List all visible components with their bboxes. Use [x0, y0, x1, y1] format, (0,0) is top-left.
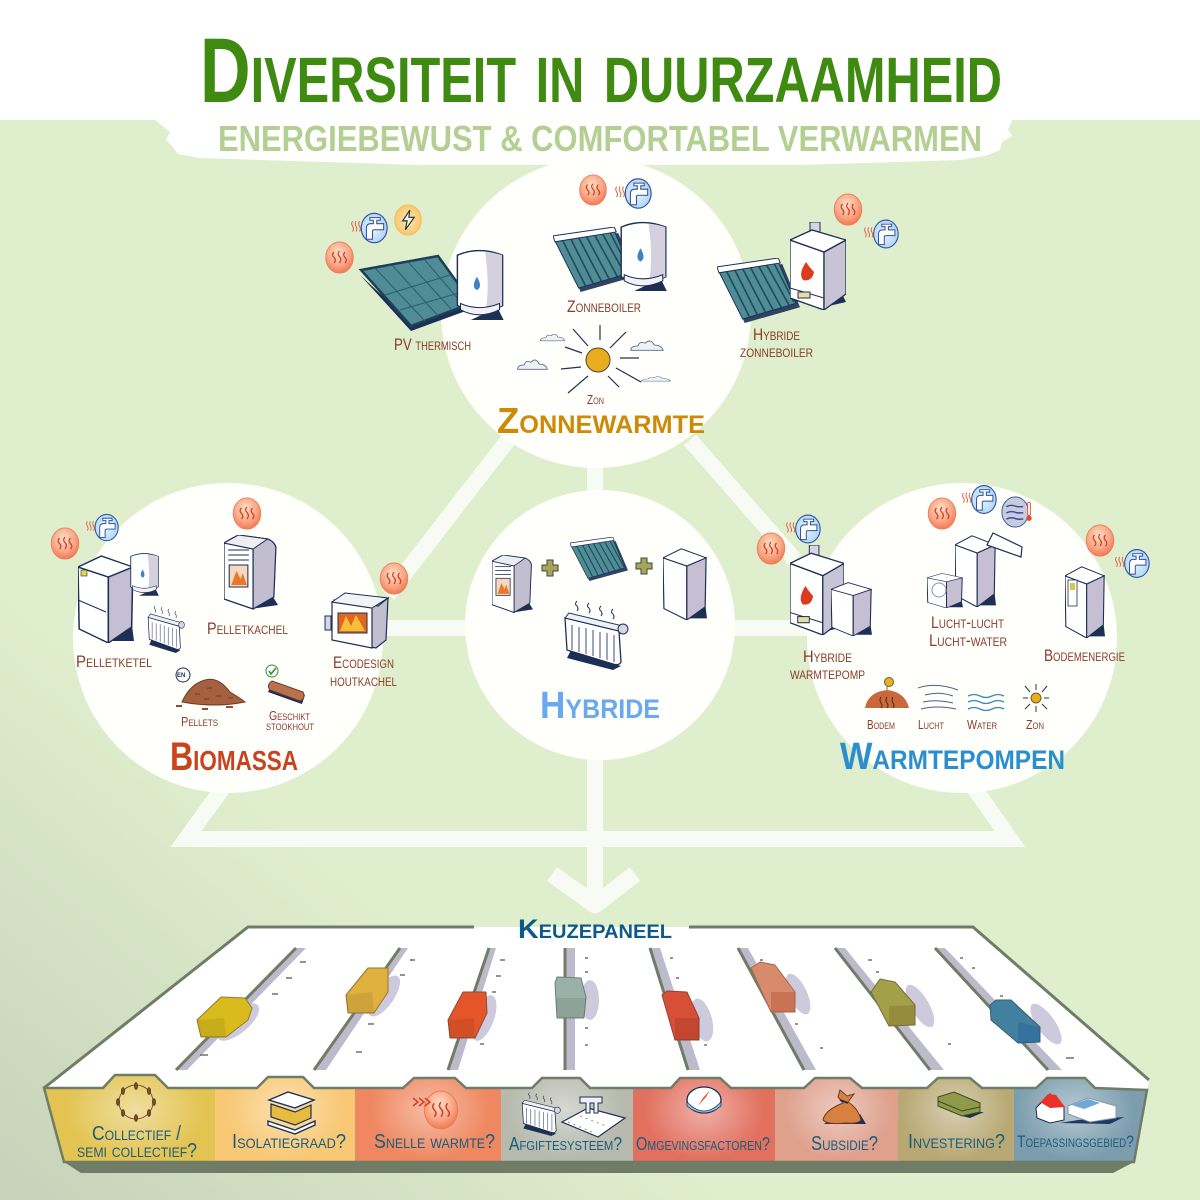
slider tracks — [176, 948, 1062, 1070]
arrow to keuzepaneel — [552, 874, 635, 905]
bubbles — [834, 194, 898, 248]
icon: snelle warmte — [413, 1091, 458, 1129]
icon: subsidie geldzak — [823, 1090, 866, 1124]
label: Zonneboiler — [567, 297, 641, 316]
icon: investering biljetten — [938, 1092, 984, 1118]
icon: hybride warmtepomp — [790, 545, 872, 636]
connection lines between circles — [186, 440, 1010, 900]
label: semi collectief? — [77, 1140, 197, 1162]
bubble — [233, 498, 261, 529]
icon: zon met wolken — [518, 325, 670, 393]
bubbles bodemenergie — [1086, 525, 1149, 577]
icon: bodemwarmtepomp — [1065, 567, 1105, 638]
heading: Hybride — [540, 685, 660, 727]
icon: toepassingsgebied huis — [1033, 1094, 1124, 1124]
label: Hybride — [753, 325, 800, 344]
icon: pelletkachel — [224, 535, 278, 609]
icon: afgiftesysteem — [522, 1093, 625, 1137]
label: Snelle warmte? — [374, 1131, 495, 1153]
panel top face — [44, 927, 1149, 1095]
label: Lucht-water — [929, 631, 1007, 650]
label: Collectief / — [92, 1123, 181, 1145]
bubble — [380, 563, 408, 594]
white header band — [0, 0, 1200, 165]
slider handle 5 — [662, 991, 717, 1044]
label: stookhout — [266, 719, 314, 733]
label: Lucht-lucht — [931, 613, 1005, 632]
slider handle 7 — [871, 979, 940, 1031]
labels bron: Bodem — [867, 718, 895, 732]
heading: Warmtepompen — [840, 736, 1065, 778]
label: Toepassingsgebied? — [1017, 1132, 1134, 1151]
labels bron: Lucht — [918, 718, 944, 732]
icon: pellets: EN — [177, 673, 185, 679]
slider handle 4 — [555, 977, 599, 1020]
label: Geschikt — [269, 709, 310, 723]
panel: zonnewarmte — [326, 158, 898, 468]
slider handle 3 — [448, 992, 502, 1044]
icon: plus — [636, 558, 652, 574]
bubbles hybride warmtepomp — [757, 515, 820, 564]
icon: pellets — [176, 668, 245, 709]
label: Ecodesign — [333, 653, 394, 672]
bubbles pelletketel — [51, 514, 118, 559]
label: warmtepomp — [790, 664, 865, 683]
label: Zon — [587, 393, 604, 407]
icon: isolatie — [268, 1092, 315, 1134]
icon: bodem — [865, 678, 909, 708]
labels bron: Water — [967, 718, 997, 732]
labels bron: Zon — [1026, 718, 1044, 732]
label: Isolatiegraad? — [232, 1131, 346, 1153]
icon: pelletkachel — [492, 555, 533, 612]
subtitle: ENERGIEBEWUST & COMFORTABEL VERWARMEN — [218, 118, 982, 159]
icon: water — [968, 694, 1004, 710]
label: Omgevingsfactoren? — [636, 1134, 770, 1154]
icon: ecodesign houtkachel — [325, 593, 388, 648]
slider handle 6 — [751, 962, 815, 1018]
label: Hybride — [803, 647, 852, 666]
icon: lucht — [918, 685, 958, 709]
heading: Keuzepaneel — [518, 914, 672, 944]
heading: Biomassa — [170, 735, 298, 779]
icon: warmte en tapwater zonneboiler — [580, 175, 651, 208]
icon: pv thermisch bubbles — [326, 205, 421, 273]
heading: Zonnewarmte — [497, 400, 705, 441]
label: houtkachel — [330, 671, 397, 690]
icon: collectief ring — [116, 1082, 156, 1122]
panel: keuzepaneel — [40, 914, 1154, 1173]
slider handle 8 — [990, 999, 1067, 1049]
label: Bodemenergie — [1044, 646, 1125, 665]
icon: hybride zonneboiler — [717, 222, 846, 323]
front strip coloured segments — [46, 1076, 1146, 1161]
label: Pelletkachel — [207, 619, 288, 638]
icon: warmtepomp kast — [663, 549, 707, 620]
icon: plus — [542, 560, 558, 576]
icon: pelletketel met tank en radiator — [78, 554, 184, 653]
panel: hybride — [465, 490, 735, 760]
icon: zonneboiler collector en tank — [553, 223, 667, 292]
panel shadow — [64, 1162, 1134, 1173]
label: Pellets — [181, 715, 218, 729]
icon: pv thermisch panel — [360, 256, 474, 331]
panel: biomassa — [51, 483, 408, 793]
slider ticks — [200, 958, 1074, 1058]
label: Subsidie? — [811, 1133, 878, 1155]
icon: radiator — [565, 601, 628, 670]
label: Investering? — [908, 1131, 1005, 1153]
panel: warmtepompen — [757, 483, 1149, 793]
label: Pelletketel — [76, 652, 152, 671]
strip outline — [44, 1075, 1147, 1162]
slider handle 1 — [197, 997, 265, 1047]
label: zonneboiler — [740, 342, 813, 361]
icon: collector — [570, 537, 628, 581]
icon: boiler pv — [457, 251, 504, 320]
slider track dark edges — [176, 948, 1048, 1070]
icon: lucht-water unit — [927, 533, 1022, 608]
icon: geschikt stookhout — [266, 665, 305, 704]
icon: zon — [1023, 684, 1049, 712]
label: Afgiftesysteem? — [509, 1134, 622, 1154]
panel outline — [44, 927, 1149, 1088]
labels bron — [867, 718, 1044, 732]
icon: omgeving kompas — [687, 1087, 721, 1113]
bubbles lucht — [928, 486, 1032, 529]
label: PV thermisch — [394, 335, 471, 354]
slider handle 2 — [346, 968, 406, 1021]
